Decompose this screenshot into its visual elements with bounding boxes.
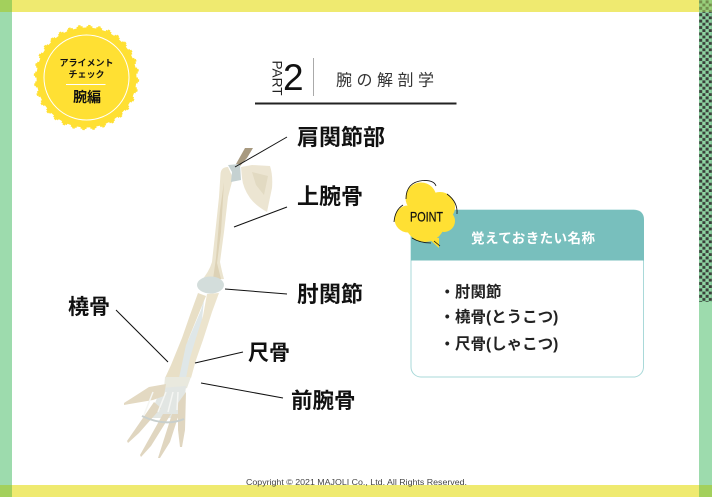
leader lines <box>116 137 287 398</box>
ring finger <box>158 414 179 458</box>
index finger <box>127 402 161 443</box>
shoulder cartilage <box>228 164 241 182</box>
list item: ulna: ・尺骨(しゃこつ) <box>440 335 558 353</box>
ulna <box>186 293 219 378</box>
badge text: arm section: 腕編 <box>73 89 101 105</box>
radius <box>165 293 206 378</box>
panel header <box>411 210 644 260</box>
label: humerus: 上腕骨 <box>297 184 363 209</box>
scapula <box>241 165 272 212</box>
label: elbow joint: 肘関節 <box>297 282 363 307</box>
little finger <box>178 392 186 447</box>
label: ulna: 尺骨 <box>248 342 290 365</box>
point label: POINT <box>410 208 443 224</box>
palm <box>148 386 186 418</box>
label: radius: 橈骨 <box>68 296 110 319</box>
title block <box>255 57 456 104</box>
list item: radius: ・橈骨(とうこつ) <box>440 307 558 326</box>
elbow cartilage <box>197 276 224 294</box>
clavicle <box>236 148 253 166</box>
arm skeleton illustration <box>124 148 272 458</box>
wrist <box>164 377 191 394</box>
palmar ligament band <box>142 416 184 422</box>
label: forearm bones: 前腕骨 <box>291 389 356 413</box>
title text: 腕の解剖学 <box>336 72 434 90</box>
label: shoulder joint: 肩関節部 <box>297 125 385 150</box>
thumb <box>124 384 166 405</box>
badge: alignment check, arm <box>34 26 138 130</box>
panel: names to remember <box>411 210 644 377</box>
list item: elbow joint: ・肘関節 <box>440 282 502 301</box>
interosseous membrane <box>179 300 204 378</box>
point burst callout <box>394 180 457 248</box>
humerus <box>201 167 233 281</box>
part number: 2 <box>283 57 304 98</box>
panel heading text: 覚えておきたい名称 <box>471 230 596 246</box>
part label: PART <box>270 60 284 96</box>
badge text: alignment check: アライメント <box>59 58 114 68</box>
copyright: Copyright © 2021 MAJOLI Co., Ltd. All Rights Reserved. <box>246 478 467 487</box>
badge text: check: チェック <box>68 70 105 80</box>
middle finger <box>140 414 171 457</box>
